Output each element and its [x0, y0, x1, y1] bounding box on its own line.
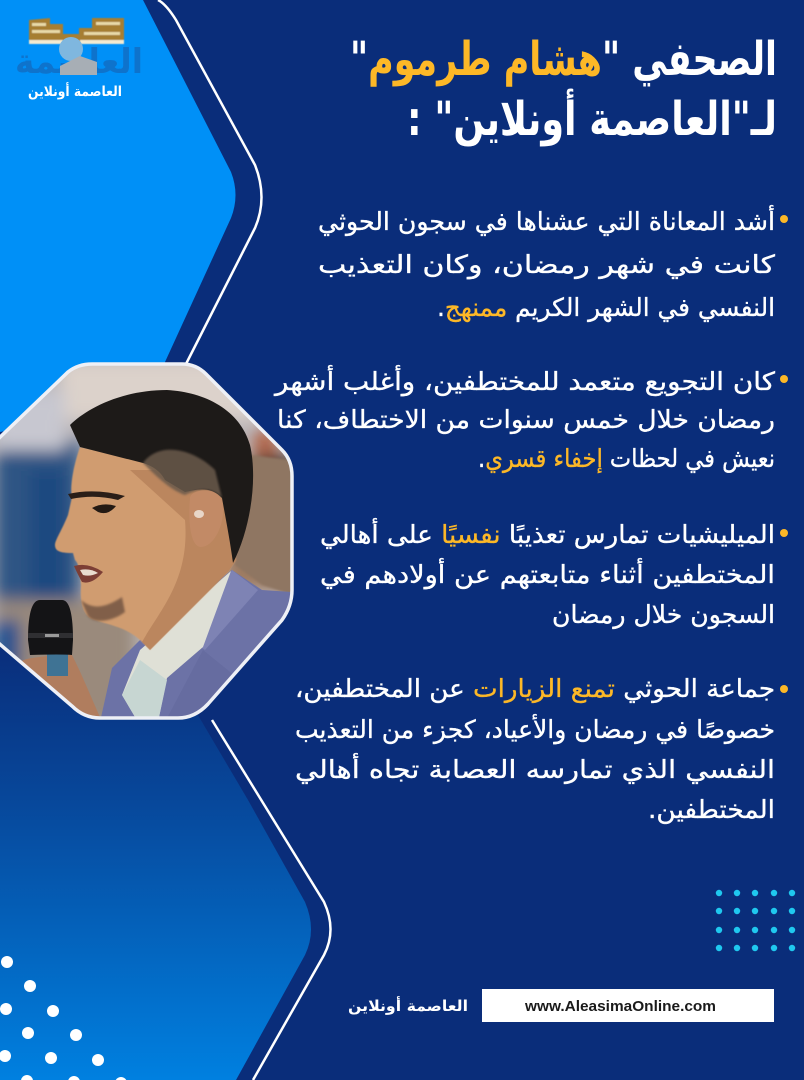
bullet: [780, 529, 788, 537]
man in back: [235, 455, 292, 595]
logo subtitle: العاصمة أونلاين: [28, 82, 122, 100]
dots: light blue grid: [716, 890, 795, 951]
dots: white bottom left: [0, 956, 127, 1080]
jacket fold: [202, 570, 258, 650]
line: خصوصًا في رمضان والأعياد، كجزء من التعذيب: [295, 713, 775, 745]
line: رمضان خلال خمس سنوات من الاختطاف، كنا: [277, 405, 775, 434]
logo: Al-Asima Online: [15, 18, 143, 100]
photo: portrait of journalist: [0, 360, 295, 725]
bullet: [780, 215, 788, 223]
footer label: العاصمة أونلاين: [348, 996, 468, 1015]
icon: logo stone mark: [60, 56, 97, 75]
hair: [70, 390, 253, 563]
bullet: [780, 685, 788, 693]
title: [350, 32, 777, 147]
line: المختطفين.: [648, 795, 775, 824]
logo wordmark: العاصمة: [15, 42, 143, 82]
text block: point 1: [318, 204, 788, 323]
hand: [22, 654, 100, 716]
ear: [192, 490, 222, 500]
line: جماعة الحوثي تمنع الزيارات عن المختطفين،: [295, 674, 775, 704]
line: كان التجويع متعمد للمختطفين، وأغلب أشهر: [273, 364, 775, 397]
shirt: [122, 571, 231, 722]
line: السجون خلال رمضان: [552, 600, 775, 629]
text block: point 2: [273, 364, 788, 474]
face: [55, 447, 236, 650]
line: الميليشيات تمارس تعذيبًا نفسيًا على أهالي: [320, 517, 775, 549]
beard: [81, 597, 125, 621]
text block: point 3: [320, 517, 788, 629]
microphone: [47, 654, 68, 676]
footer url box: www.AleasimaOnline.com: [524, 998, 716, 1015]
bullet: [780, 375, 788, 383]
line: كانت في شهر رمضان، وكان التعذيب: [318, 250, 775, 280]
line: نعيش في لحظات إخفاء قسري.: [478, 444, 775, 474]
face shadow: [130, 470, 236, 650]
line: أشد المعاناة التي عشناها في سجون الحوثي: [318, 204, 775, 236]
mouth: [74, 565, 103, 583]
panel: light blue hexagon: [0, 0, 236, 432]
outline: upper white curve: [158, 0, 262, 364]
outline: lower white curve: [212, 720, 330, 1080]
jacket: [100, 570, 292, 722]
hair fade: [143, 450, 222, 498]
panel: lower blue hexagon: [0, 640, 311, 1080]
eye and brow: [68, 491, 125, 500]
line: النفسي في الشهر الكريم ممنهج.: [437, 293, 775, 323]
icon: globe emblem: [59, 37, 83, 61]
line: النفسي الذي تمارسه العصابة تجاه أهالي: [295, 752, 775, 784]
text block: point 4: [295, 674, 788, 824]
icon: buildings: [29, 18, 124, 44]
footer url box: [482, 989, 774, 1022]
line: المختطفين أثناء متابعتهم عن أولادهم في: [320, 557, 775, 590]
